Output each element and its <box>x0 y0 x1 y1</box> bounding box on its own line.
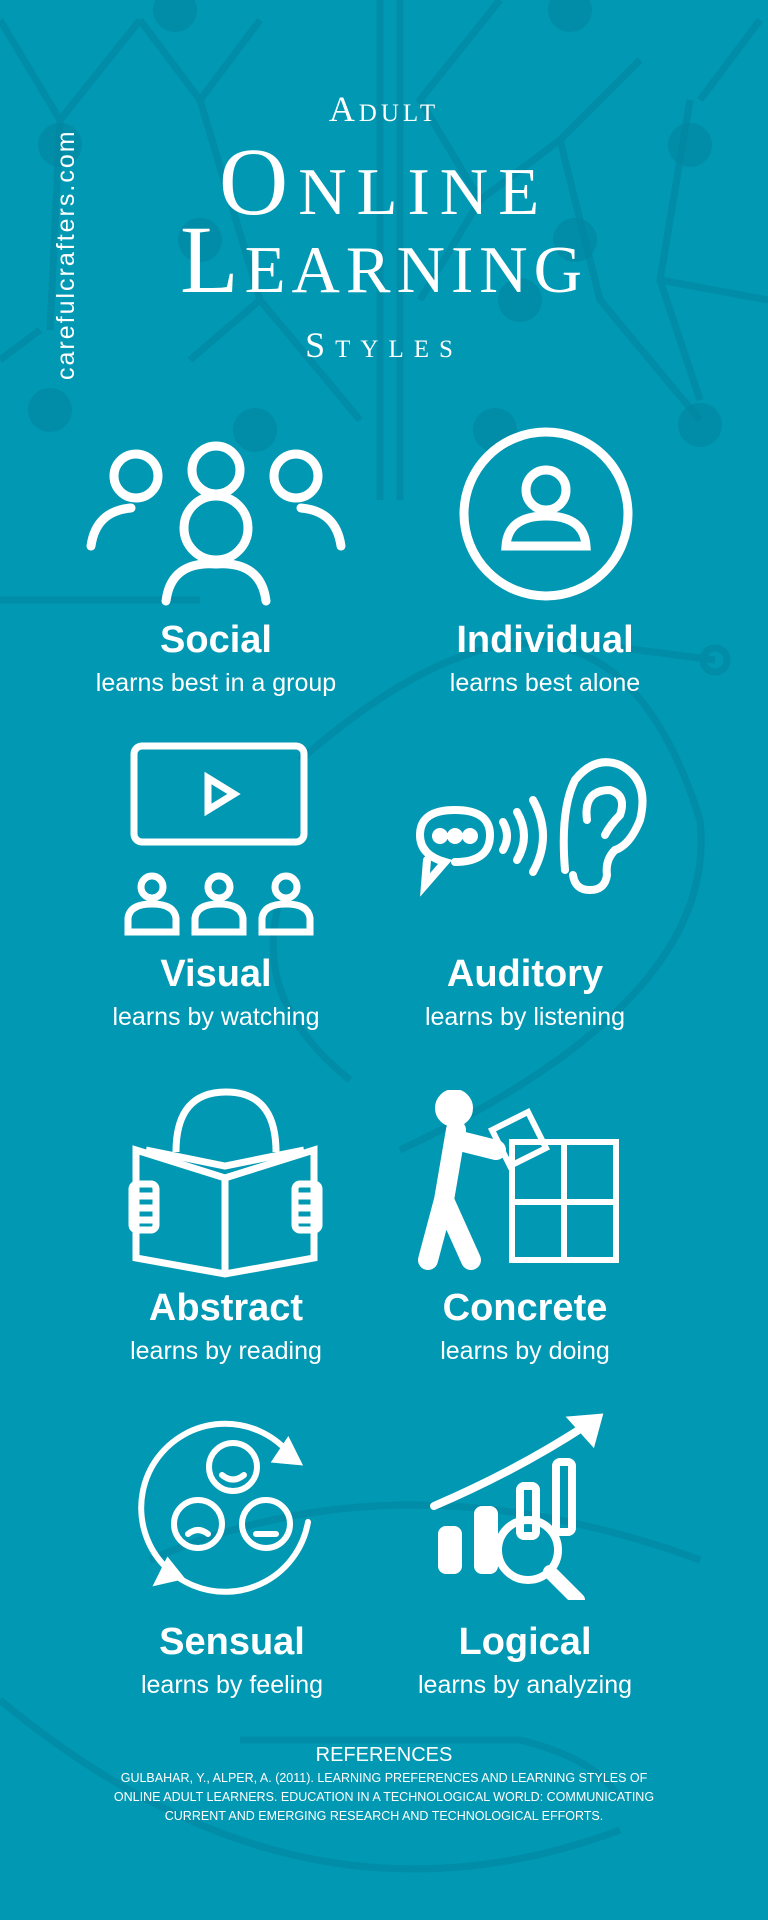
label: Visual: Visual <box>160 953 272 995</box>
label: Logical: learns by analyzing <box>418 1671 632 1699</box>
references: GULBAHAR, Y., ALPER, A. (2011). LEARNING PREFERENCES AND LEARNING STYLES OF <box>121 1771 647 1785</box>
title: Styles <box>305 325 463 365</box>
references: CURRENT AND EMERGING RESEARCH AND TECHNOLOGICAL EFFORTS. <box>165 1809 603 1823</box>
icon: sensual emotions <box>138 1420 311 1595</box>
title <box>180 89 588 365</box>
label: Abstract <box>130 1287 322 1365</box>
icon: abstract reading <box>128 1088 322 1278</box>
icon: auditory <box>416 758 647 897</box>
label: Sensual: Sensual <box>159 1621 305 1663</box>
label: Individual: Individual <box>456 619 634 661</box>
title: Online <box>219 128 549 235</box>
label: Abstract: learns by reading <box>130 1337 322 1365</box>
icon: social group <box>86 442 346 606</box>
icon: concrete puzzle <box>418 1090 619 1270</box>
label: Logical: Logical <box>458 1621 592 1663</box>
references: REFERENCES <box>316 1744 452 1766</box>
label: Individual <box>450 619 640 697</box>
label: Sensual <box>141 1621 323 1699</box>
label: Concrete <box>440 1287 610 1365</box>
title: Learning <box>180 206 588 313</box>
label: Auditory <box>425 953 625 1031</box>
label: Visual: learns by watching <box>112 1003 320 1031</box>
label: Abstract: Abstract <box>149 1287 303 1329</box>
icon: visual <box>124 742 314 936</box>
label: Logical <box>418 1621 632 1699</box>
label: Auditory: Auditory <box>447 953 603 995</box>
references: ONLINE ADULT LEARNERS. EDUCATION IN A TECHNOLOGICAL WORLD: COMMUNICATING <box>114 1790 654 1804</box>
label: Social: Social <box>160 619 272 661</box>
label: Social <box>96 619 336 697</box>
label: Concrete: Concrete <box>443 1287 607 1329</box>
vertical website text: carefulcrafters.com <box>52 129 80 380</box>
label: Visual <box>112 953 320 1031</box>
icon: individual <box>460 428 632 600</box>
label: Sensual: learns by feeling <box>141 1671 323 1699</box>
title: Adult <box>329 89 439 129</box>
icon: logical chart <box>430 1414 604 1600</box>
label: Auditory: learns by listening <box>425 1003 625 1031</box>
label: Social: learns best in a group <box>96 669 336 697</box>
references <box>114 1744 654 1823</box>
label: Individual: learns best alone <box>450 669 640 697</box>
label: Concrete: learns by doing <box>440 1337 610 1365</box>
